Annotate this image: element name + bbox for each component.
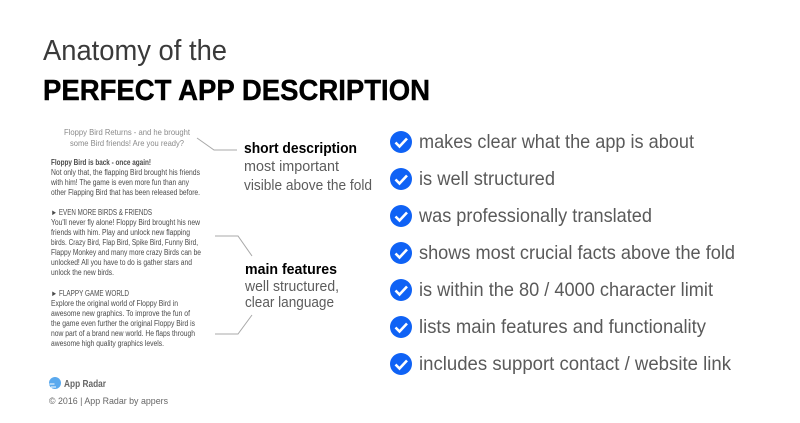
intro paragraph	[50, 158, 200, 197]
feature section: even more birds: friends with him. Play and unlock new flapping	[51, 228, 190, 237]
callout: short description: short description	[244, 140, 357, 157]
item: main features: lists main features and functionality	[419, 316, 706, 338]
intro paragraph: other Flapping Bird that has been released before.	[51, 188, 200, 197]
feature section: even more birds: Flappy Monkey and many more crazy Birds can be	[51, 248, 201, 257]
callout: short description	[244, 140, 372, 194]
short description sample text	[64, 128, 191, 148]
short description sample text: Floppy Bird Returns - and he brought	[64, 128, 191, 137]
item: clear purpose: makes clear what the app is about	[419, 131, 695, 153]
logo: App Radar: App Radar	[64, 378, 106, 390]
feature section: even more birds: You'll never fly alone! Floppy Bird brought his new	[51, 218, 200, 227]
callout: main features	[244, 261, 339, 311]
feature section: flappy game world: ► FLAPPY GAME WORLD	[51, 289, 129, 298]
feature section: flappy game world: the game even further the original Floppy Bird is	[51, 319, 195, 328]
callout: main features: clear language	[245, 295, 334, 311]
logo: App Radar	[49, 375, 106, 390]
callout line: short description	[197, 138, 237, 150]
feature section: even more birds: birds. Crazy Bird, Flap Bird, Spike Bird, Funny Bird,	[51, 238, 198, 247]
item: above the fold: shows most crucial facts above the fold	[419, 242, 735, 264]
item: support contact: includes support contact / website link	[419, 353, 731, 375]
callout: short description: visible above the fold	[244, 178, 372, 194]
copyright: © 2016 | App Radar by appers	[49, 396, 168, 407]
callout: short description: most important	[244, 159, 339, 175]
callout line: main features top	[215, 236, 252, 256]
feature section: even more birds	[51, 208, 201, 277]
feature section: flappy game world	[51, 289, 195, 348]
item: well structured: is well structured	[419, 168, 555, 190]
item: translated: was professionally translated	[418, 205, 652, 227]
feature section: flappy game world: now part of a brand new world. He flaps through	[51, 329, 195, 338]
intro paragraph: with him! The game is even more fun than any	[50, 178, 189, 187]
callout line: main features bottom	[215, 315, 252, 334]
callout: main features: main features	[245, 261, 337, 278]
feature section: flappy game world: awesome new graphics. To improve the fun of	[51, 309, 191, 318]
feature section: even more birds: unlocked! All you have to do is gather stars and	[51, 258, 192, 267]
feature section: even more birds: ► EVEN MORE BIRDS & FRIENDS	[51, 208, 152, 217]
feature section: flappy game world: awesome high quality graphics levels.	[51, 339, 164, 348]
short description sample text: some Bird friends! Are you ready?	[70, 139, 184, 148]
title	[43, 35, 430, 107]
callout: main features: well structured,	[244, 279, 339, 295]
intro paragraph: Not only that, the flapping Bird brought his friends	[51, 168, 200, 177]
title: Anatomy of the	[43, 35, 227, 67]
feature section: flappy game world: Explore the original world of Floppy Bird in	[51, 299, 178, 308]
title: PERFECT APP DESCRIPTION	[43, 75, 430, 107]
intro paragraph: Floppy Bird is back - once again!	[51, 158, 151, 167]
icon: radar	[49, 375, 61, 389]
item: character limit: is within the 80 / 4000 character limit	[419, 279, 714, 301]
panel: sample app description	[50, 128, 201, 348]
feature section: even more birds: unlock the new birds.	[51, 268, 114, 277]
checklist	[390, 131, 735, 375]
